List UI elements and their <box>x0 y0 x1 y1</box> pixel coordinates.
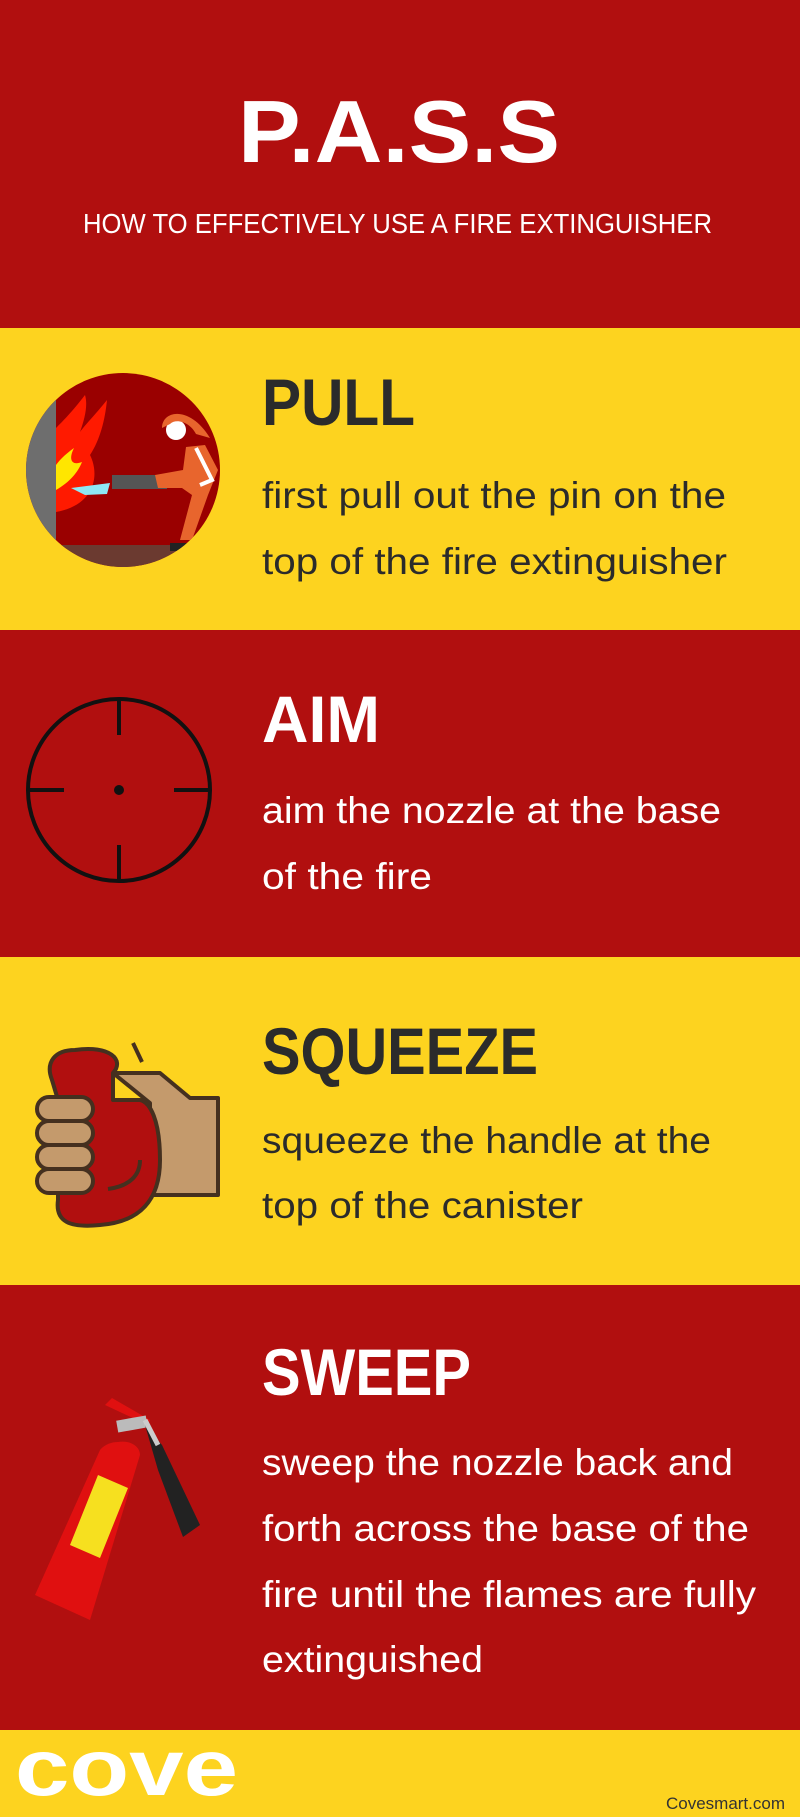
text: sweep: sweep the nozzle back and <box>262 1442 733 1483</box>
text: sweep: extinguished <box>262 1639 483 1680</box>
text: aim: of the fire <box>262 856 432 897</box>
heading: squeeze: SQUEEZE <box>262 1014 538 1088</box>
panel: squeeze <box>37 1014 711 1226</box>
text: sweep: fire until the flames are fully <box>262 1574 757 1615</box>
heading: aim: AIM <box>262 682 380 756</box>
title: P.A.S.S <box>238 82 560 181</box>
text: squeeze <box>262 1120 711 1226</box>
text: squeeze: top of the canister <box>262 1185 583 1226</box>
footer url: Covesmart.com <box>666 1794 785 1813</box>
icon: crosshair <box>28 699 210 881</box>
panel: sweep <box>35 1335 757 1680</box>
panel: pull <box>20 365 727 582</box>
text: sweep <box>262 1442 757 1680</box>
text: pull: first pull out the pin on the <box>262 475 726 516</box>
text: sweep: forth across the base of the <box>262 1508 749 1549</box>
icon: fist <box>37 1043 218 1226</box>
icon: firefighter <box>26 373 220 567</box>
icon: extinguisher <box>35 1398 200 1620</box>
heading: pull: PULL <box>262 365 415 439</box>
text: aim <box>262 790 721 897</box>
text: pull: top of the fire extinguisher <box>262 541 727 582</box>
subtitle: HOW TO EFFECTIVELY USE A FIRE EXTINGUISHER <box>83 208 712 239</box>
text: squeeze: squeeze the handle at the <box>262 1120 711 1161</box>
logo: cove: cove <box>15 1723 238 1812</box>
text: aim: aim the nozzle at the base <box>262 790 721 831</box>
text: pull <box>262 475 727 582</box>
panel: aim <box>28 682 721 897</box>
heading: sweep: SWEEP <box>262 1335 471 1409</box>
